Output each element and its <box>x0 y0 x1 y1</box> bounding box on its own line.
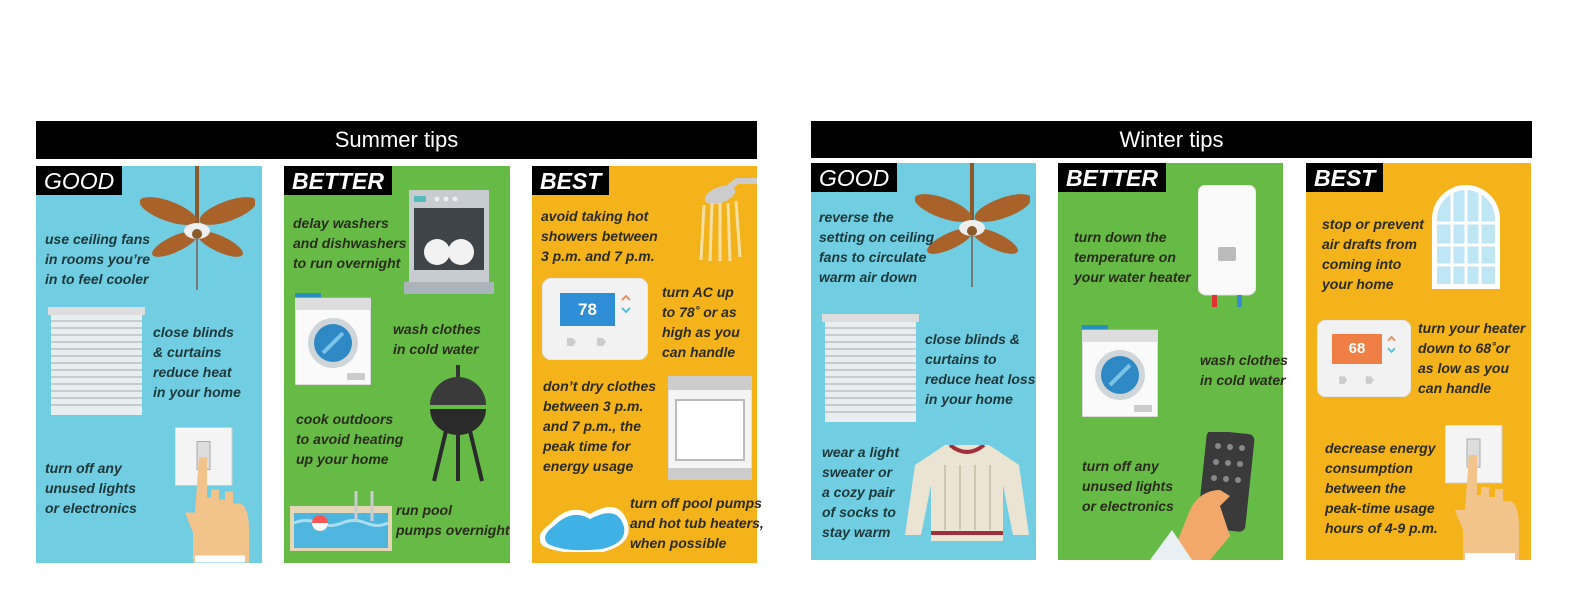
icon: grill <box>430 365 486 482</box>
text: lights <box>45 460 137 516</box>
text: sweater: a cozy pair <box>822 484 894 500</box>
text: wash clothes <box>393 321 481 357</box>
text: pool pumps hot tub <box>630 495 764 551</box>
text: air drafts: your home <box>1322 276 1394 292</box>
text: lights: turn off any <box>45 460 122 476</box>
text: AC: high as you <box>662 324 740 340</box>
text: pool pumps hot tub: turn off pool pumps <box>630 495 762 511</box>
label: GOOD: GOOD <box>44 168 114 194</box>
icon: ceiling fan <box>915 163 1030 287</box>
text: pool pumps hot tub: and hot tub heaters, <box>630 515 764 531</box>
icon: hot tub <box>540 507 629 552</box>
icon: blinds <box>48 307 145 415</box>
text: water heater: your water heater <box>1074 269 1191 285</box>
text: close blinds <box>925 331 1036 407</box>
panel: summer good <box>36 166 262 563</box>
text: close blinds: close blinds & <box>925 331 1020 347</box>
label: BETTER: BETTER <box>292 168 384 194</box>
text: dry clothes: energy usage <box>543 458 633 474</box>
text: dishwashers <box>293 215 407 271</box>
text: close blinds: in your home <box>925 391 1013 407</box>
text: heater 68: turn your heater <box>1418 320 1525 336</box>
panel: summer better <box>284 166 510 563</box>
icon: pool <box>290 491 392 551</box>
text: showers: 3 p.m. and 7 p.m. <box>541 248 655 264</box>
text: sweater: stay warm <box>822 524 890 540</box>
text: showers: showers between <box>541 228 658 244</box>
icon: thermostat 68: 68 <box>1349 340 1365 357</box>
text: showers: avoid taking hot <box>541 208 648 224</box>
text: water heater: turn down the <box>1074 229 1167 245</box>
text: air drafts: air drafts from <box>1322 236 1417 252</box>
icon: dishwasher <box>404 190 494 294</box>
text: dry clothes <box>542 378 656 474</box>
icon: window <box>1432 185 1500 289</box>
icon: thermostat 78: 78 <box>578 300 597 319</box>
text: wash clothes: in cold water <box>393 341 479 357</box>
text: sweater: sweater or <box>822 464 892 480</box>
text: dry clothes: between 3 p.m. <box>543 398 643 414</box>
text: AC: can handle <box>662 344 735 360</box>
text: wash clothes: wash clothes <box>1200 352 1288 368</box>
text: water heater <box>1073 229 1192 285</box>
text: cook outdoors: to avoid heating <box>296 431 403 447</box>
text: water heater: temperature on <box>1074 249 1176 265</box>
text: close blinds <box>153 324 241 400</box>
text: peak time: hours of 4-9 p.m. <box>1325 520 1438 536</box>
text: wash clothes: in cold water <box>1200 372 1286 388</box>
text: air drafts: coming into <box>1322 256 1401 272</box>
text: dishwashers: delay washers <box>293 215 389 231</box>
icon: ceiling fan <box>140 166 255 290</box>
icon: sweater <box>905 445 1029 541</box>
text: lights: or electronics <box>45 500 137 516</box>
text: reverse fans: reverse the <box>819 209 894 225</box>
text: cook outdoors: up your home <box>296 451 389 467</box>
text: wash clothes: wash clothes <box>393 321 481 337</box>
text: air drafts <box>1321 216 1424 292</box>
text: pool pumps hot tub: when possible <box>630 535 726 551</box>
text: close blinds: reduce heat loss <box>925 371 1036 387</box>
text: dishwashers: to run overnight <box>293 255 400 271</box>
text: ceiling fans <box>45 231 150 287</box>
text: peak time <box>1324 440 1438 536</box>
text: reverse fans: warm air down <box>819 269 917 285</box>
header: winter tips: Winter tips <box>1120 127 1223 152</box>
text: AC <box>662 284 740 360</box>
label: GOOD: GOOD <box>819 165 889 191</box>
panel: winter better <box>1058 163 1283 560</box>
icon: light switch <box>175 427 249 562</box>
text: heater 68 <box>1418 320 1526 396</box>
text: heater 68: can handle <box>1418 380 1491 396</box>
header: winter tips <box>811 121 1532 158</box>
text: close blinds: reduce heat <box>153 364 232 380</box>
text: AC: turn AC up <box>662 284 734 300</box>
text: AC: to 78˚ or as <box>662 304 737 320</box>
text: sweater: of socks to <box>822 504 896 520</box>
text: peak time: peak-time usage <box>1325 500 1435 516</box>
text: dishwashers: and dishwashers <box>293 235 407 251</box>
text: lights: unused lights <box>45 480 136 496</box>
icon: remote in hand <box>1150 432 1254 560</box>
text: sweater <box>822 444 900 540</box>
text: peak time: decrease energy <box>1325 440 1436 456</box>
text: close blinds: curtains to <box>925 351 997 367</box>
text: sweater: wear a light <box>822 444 899 460</box>
text: pool pumps <box>396 502 510 538</box>
text: dry clothes: and 7 p.m., the <box>543 418 641 434</box>
text: heater 68: down to 68˚or <box>1418 340 1510 356</box>
text: heater 68: as low as you <box>1418 360 1509 376</box>
text: air drafts: stop or prevent <box>1322 216 1424 232</box>
label: BETTER: BETTER <box>1066 165 1158 191</box>
text: pool pumps: pumps overnight <box>396 522 510 538</box>
text: wash clothes <box>1200 352 1288 388</box>
panel: winter good <box>811 163 1036 560</box>
text: reverse fans: setting on ceiling <box>819 229 934 245</box>
icon: washing machine <box>295 293 371 385</box>
icon: light switch <box>1445 425 1519 560</box>
text: showers <box>541 208 658 264</box>
text: close blinds: in your home <box>153 384 241 400</box>
text: close blinds: & curtains <box>153 344 221 360</box>
icon: thermostat 78 <box>542 278 648 360</box>
icon: thermostat 68 <box>1317 320 1411 397</box>
icon: shower <box>700 178 757 261</box>
text: cook outdoors: cook outdoors <box>296 411 393 427</box>
text: close blinds: close blinds <box>153 324 234 340</box>
text: reverse fans: fans to circulate <box>819 249 926 265</box>
text: peak time: between the <box>1325 480 1406 496</box>
text: lights: unused lights <box>1082 478 1173 494</box>
text: reverse fans <box>819 209 934 285</box>
text: peak time: consumption <box>1325 460 1413 476</box>
panel: winter best <box>1306 163 1531 560</box>
text: dry clothes: don’t dry clothes <box>543 378 656 394</box>
text: dry clothes: peak time for <box>543 438 630 454</box>
icon: dryer <box>668 376 752 480</box>
text: lights <box>1082 458 1174 514</box>
text: pool pumps: run pool <box>396 502 452 518</box>
header: summer tips <box>36 121 757 159</box>
icon: washing machine <box>1082 325 1158 417</box>
text: lights: or electronics <box>1082 498 1174 514</box>
text: ceiling fans: use ceiling fans <box>45 231 150 247</box>
text: lights: turn off any <box>1082 458 1159 474</box>
icon: water heater <box>1198 185 1256 307</box>
label: BEST: BEST <box>540 168 601 194</box>
text: ceiling fans: in to feel cooler <box>45 271 148 287</box>
text: cook outdoors <box>296 411 403 467</box>
header: summer tips: Summer tips <box>335 127 458 152</box>
icon: blinds <box>822 314 919 422</box>
label: BEST: BEST <box>1314 165 1375 191</box>
panel: summer best <box>532 166 757 563</box>
text: ceiling fans: in rooms you’re <box>45 251 150 267</box>
